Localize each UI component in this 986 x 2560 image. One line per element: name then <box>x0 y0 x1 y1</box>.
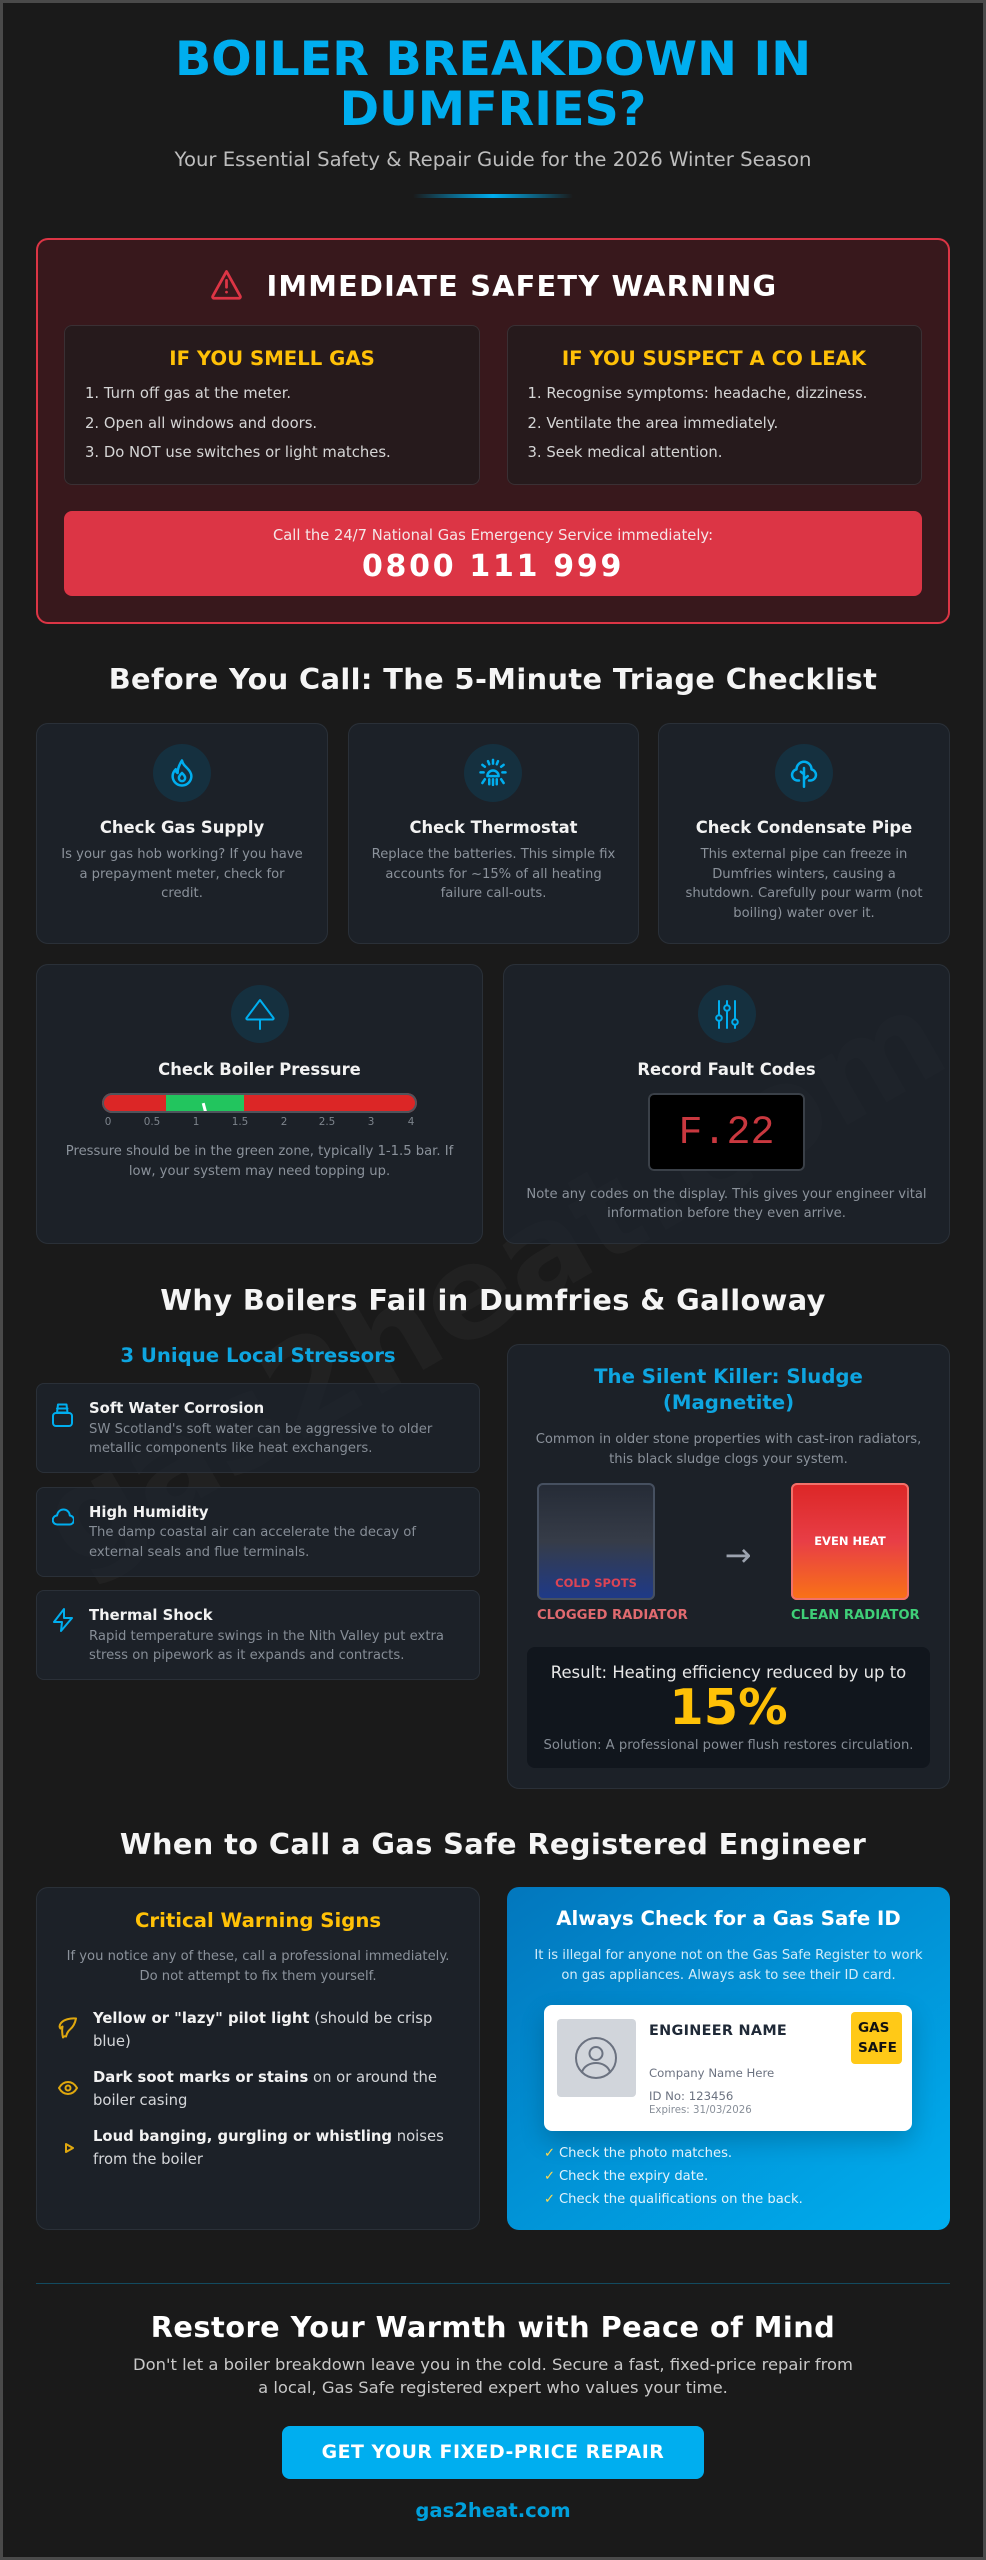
stressor title: High Humidity <box>89 1504 209 1520</box>
result text: Result: Heating efficiency reduced by up to <box>551 1663 906 1682</box>
gas safe badge <box>851 2012 902 2064</box>
panel: immediate safety warning <box>36 238 950 624</box>
panel description: It is illegal for anyone not on the Gas Safe Register to work <box>534 1948 923 1963</box>
cold spots label: COLD SPOTS <box>555 1576 637 1590</box>
warning text: Loud banging, gurgling or whistling noises <box>93 2128 444 2145</box>
radiator: clogged <box>537 1483 655 1600</box>
icon: noise play <box>65 2143 74 2153</box>
badge text <box>858 2020 897 2056</box>
engineer name: ENGINEER NAME <box>649 2023 787 2039</box>
icon: user <box>575 2037 617 2079</box>
panel description: on gas appliances. Always ask to see their ID card. <box>561 1968 896 1983</box>
text: 1 <box>193 1116 199 1128</box>
header <box>174 32 811 198</box>
panel: check thermostat <box>348 723 639 944</box>
checks list: ✓ <box>544 2169 555 2184</box>
card title: Check Condensate Pipe <box>696 818 912 837</box>
warning sign: pilot light <box>58 2010 432 2050</box>
panel: sludge <box>507 1344 950 1789</box>
icon: eye <box>58 2081 78 2095</box>
warning text: from the boiler <box>93 2151 203 2168</box>
warning text: boiler casing <box>93 2092 187 2109</box>
panel description: Common in older stone properties with cast-iron radiators, <box>536 1432 921 1447</box>
icon: sliders <box>698 985 756 1043</box>
card description: Pressure should be in the green zone, typically 1-1.5 bar. If <box>66 1144 453 1159</box>
text: 2.5 <box>319 1116 335 1128</box>
cta button <box>282 2426 704 2478</box>
icon: water container <box>52 1404 73 1427</box>
accent divider <box>413 194 573 198</box>
warning sign: noises <box>65 2128 444 2168</box>
expiry: Expires: 31/03/2026 <box>649 2105 752 2116</box>
steps list: 3. Do NOT use switches or light matches. <box>85 444 391 461</box>
card description <box>526 1186 927 1221</box>
warning text <box>93 2069 437 2109</box>
cta text: a local, Gas Safe registered expert who values your time. <box>258 2378 728 2397</box>
card description: credit. <box>161 886 203 901</box>
panel: thermal shock <box>36 1590 480 1680</box>
panel: soft water corrosion <box>36 1383 480 1473</box>
panel description <box>67 1949 449 1984</box>
steps list: 3. Seek medical attention. <box>528 444 722 461</box>
cta text <box>133 2355 853 2397</box>
check: expiry: Check the expiry date. <box>559 2169 708 2184</box>
website: gas2heat.com <box>415 2499 571 2522</box>
green zone <box>166 1093 244 1113</box>
stressor description <box>89 1628 444 1663</box>
icon: cloud <box>52 1508 74 1526</box>
heading: IF YOU SMELL GAS <box>169 347 375 370</box>
text: 3 <box>368 1116 374 1128</box>
card description: Replace the batteries. This simple fix <box>372 847 615 862</box>
panel: high humidity <box>36 1486 480 1576</box>
steps list: 2. Open all windows and doors. <box>85 415 317 432</box>
clogged label: CLOGGED RADIATOR <box>537 1608 688 1623</box>
card description: failure call-outs. <box>441 886 546 901</box>
stressor title: Thermal Shock <box>89 1607 213 1624</box>
divider <box>36 2283 950 2284</box>
card title: Check Gas Supply <box>100 818 264 837</box>
warning sign: soot <box>58 2069 437 2109</box>
warning text: blue) <box>93 2033 131 2050</box>
panel description <box>536 1432 921 1467</box>
card title: Check Thermostat <box>409 818 578 837</box>
card title: Check Boiler Pressure <box>158 1060 361 1079</box>
check: qualifications: Check the qualifications on the back. <box>559 2192 803 2207</box>
card description: accounts for ~15% of all heating <box>385 867 602 882</box>
steps list: 1. Turn off gas at the meter. <box>85 385 291 402</box>
panel: check gas supply <box>36 723 328 944</box>
emergency text: Call the 24/7 National Gas Emergency Service immediately: <box>273 527 713 544</box>
stressor description: stress on pipework as it expands and contracts. <box>89 1648 404 1663</box>
gauge bar <box>102 1093 417 1113</box>
company name: Company Name Here <box>649 2066 774 2080</box>
card description <box>61 847 303 901</box>
panel: record fault codes <box>503 964 950 1244</box>
text: 4 <box>408 1116 414 1128</box>
steps list: 1. Recognise symptoms: headache, dizziness. <box>528 385 867 402</box>
solution text: Solution: A professional power flush restores circulation. <box>544 1738 913 1753</box>
title <box>175 32 811 136</box>
card description: a prepayment meter, check for <box>79 867 285 882</box>
panel description <box>534 1948 923 1983</box>
even heat label: EVEN HEAT <box>814 1534 886 1548</box>
gauge labels: 0 <box>105 1116 111 1128</box>
cta text: Don't let a boiler breakdown leave you in the cold. Secure a fast, fixed-price repair from <box>133 2355 853 2374</box>
heading: why boilers fail: Why Boilers Fail in Dumfries & Galloway <box>160 1283 826 1317</box>
arrow: → <box>725 1536 751 1574</box>
call to action <box>133 2310 853 2522</box>
checks list: ✓ <box>544 2146 555 2161</box>
button label: GET YOUR FIXED-PRICE REPAIR <box>322 2440 664 2462</box>
icon: lightning bolt <box>53 1608 73 1632</box>
card description: information before they even arrive. <box>607 1206 846 1221</box>
card description: low, your system may need topping up. <box>129 1164 390 1179</box>
panel title <box>594 1365 863 1414</box>
badge text: GAS <box>858 2020 889 2036</box>
card description: shutdown. Carefully pour warm (not <box>686 886 922 901</box>
heading: triage checklist: Before You Call: The 5-Minute Triage Checklist <box>109 662 877 696</box>
panel description: this black sludge clogs your system. <box>609 1452 848 1467</box>
panel: check boiler pressure <box>36 964 483 1244</box>
title: DUMFRIES? <box>340 82 646 136</box>
icon: pilot flame <box>58 2017 77 2038</box>
card description: Dumfries winters, causing a <box>712 867 896 882</box>
steps list <box>528 385 867 461</box>
gauge outline <box>102 1093 417 1113</box>
clean label: CLEAN RADIATOR <box>791 1608 920 1623</box>
stressor description: SW Scotland's soft water can be aggressive to older <box>89 1422 432 1436</box>
checks list: ✓ <box>544 2192 555 2207</box>
panel title: Critical Warning Signs <box>135 1909 381 1932</box>
fault code: F.22 <box>678 1110 774 1156</box>
warning text: Dark soot marks or stains on or around the <box>93 2069 437 2086</box>
warning text: Yellow or "lazy" pilot light (should be crisp <box>93 2010 432 2027</box>
card description <box>686 847 922 921</box>
title: BOILER BREAKDOWN IN <box>175 32 811 87</box>
badge text: SAFE <box>858 2040 897 2056</box>
icon: cloud pipe <box>775 744 833 802</box>
card description <box>66 1144 454 1179</box>
needle <box>202 1103 207 1113</box>
check: photo: Check the photo matches. <box>559 2146 732 2161</box>
panel description: If you notice any of these, call a professional immediately. <box>67 1949 449 1964</box>
stressor description: external seals and flue terminals. <box>89 1545 309 1560</box>
card title: Record Fault Codes <box>637 1060 816 1079</box>
panel: critical warning signs <box>36 1887 480 2230</box>
panel title: The Silent Killer: Sludge <box>594 1365 863 1388</box>
panel: if you smell gas <box>64 325 480 485</box>
card description: Is your gas hob working? If you have <box>61 847 303 862</box>
stressor description <box>88 1525 416 1560</box>
card description: This external pipe can freeze in <box>701 847 907 862</box>
icon: pressure <box>230 985 288 1043</box>
fault code display <box>648 1093 805 1171</box>
phone number: 0800 111 999 <box>362 549 624 584</box>
panel: check condensate pipe <box>658 723 950 944</box>
steps list <box>85 385 391 461</box>
icon: thermostat <box>464 744 522 802</box>
photo placeholder <box>557 2019 636 2097</box>
warning text <box>92 2010 432 2050</box>
icon: flame <box>153 744 211 802</box>
card description: boiling) water over it. <box>733 906 875 921</box>
subtitle: Your Essential Safety & Repair Guide for the 2026 Winter Season <box>175 148 811 171</box>
stressor description: metallic components like heat exchangers. <box>89 1441 372 1456</box>
heading: IF YOU SUSPECT A CO LEAK <box>562 347 866 370</box>
result box <box>527 1647 930 1768</box>
text: 1.5 <box>232 1116 248 1128</box>
panel: gas safe id <box>507 1887 950 2230</box>
panel: if you suspect a co leak <box>506 325 922 485</box>
card description <box>372 847 615 901</box>
icon: warning triangle <box>211 270 242 300</box>
big number: 15% <box>669 1678 788 1736</box>
steps list: 2. Ventilate the area immediately. <box>528 415 778 432</box>
warning text <box>93 2128 444 2168</box>
heading: local stressors: 3 Unique Local Stressors <box>120 1344 396 1367</box>
panel title: (Magnetite) <box>663 1391 794 1414</box>
text: 2 <box>281 1116 287 1128</box>
stressor description: The damp coastal air can accelerate the decay of <box>89 1525 416 1540</box>
stressor description: Rapid temperature swings in the Nith Valley put extra <box>89 1628 444 1644</box>
checks list <box>544 2146 803 2207</box>
callout: emergency number <box>64 511 922 596</box>
stressor description <box>89 1422 432 1456</box>
stressor title: Soft Water Corrosion <box>89 1400 264 1417</box>
heading: when to call: When to Call a Gas Safe Registered Engineer <box>120 1827 866 1861</box>
text: 0.5 <box>144 1116 160 1128</box>
heading: immediate safety warning: IMMEDIATE SAFETY WARNING <box>266 268 777 302</box>
radiator: clean <box>791 1483 909 1600</box>
id number: ID No: 123456 <box>649 2089 733 2103</box>
panel title: Always Check for a Gas Safe ID <box>556 1907 901 1930</box>
panel description: Do not attempt to fix them yourself. <box>139 1969 377 1984</box>
card description: Note any codes on the display. This gives your engineer vital <box>526 1186 927 1202</box>
watermark: gas2heat.com <box>16 961 969 1598</box>
cta heading: Restore Your Warmth with Peace of Mind <box>151 2310 835 2344</box>
id card <box>544 2005 912 2131</box>
pressure gauge <box>102 1093 417 1128</box>
